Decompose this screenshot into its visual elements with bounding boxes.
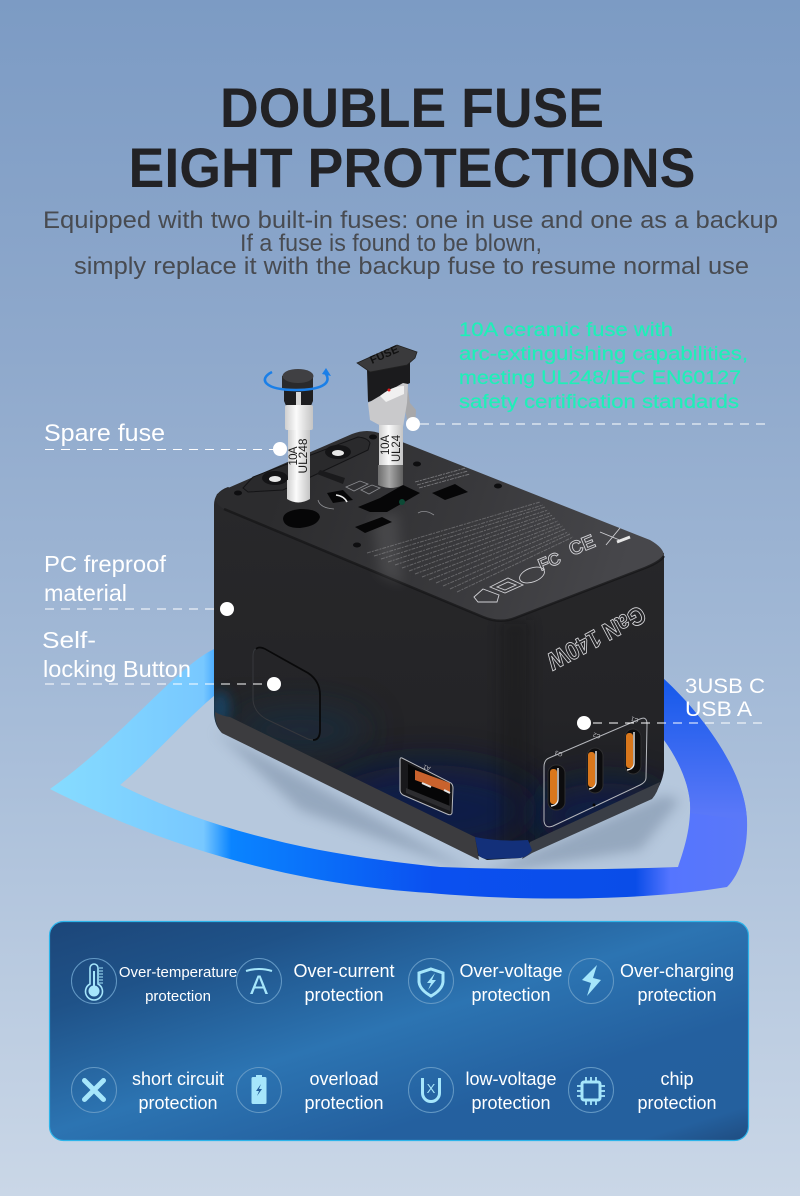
port labels: C1	[630, 714, 640, 723]
subtitle text block	[43, 207, 778, 280]
item: short circuit: protection	[138, 1093, 218, 1113]
callout: ceramic fuse: meeting UL248/IEC EN60127	[459, 368, 741, 389]
callout: USB ports: USB A	[685, 698, 752, 721]
item: over-current	[236, 958, 395, 1005]
callout: ceramic fuse: safety certification standards	[459, 392, 739, 413]
item: over-temperature: protection	[145, 988, 211, 1005]
red dot	[388, 388, 390, 392]
item: over-charging: protection	[637, 985, 717, 1005]
collar	[285, 405, 313, 430]
port C2	[587, 748, 603, 793]
plate holes	[262, 445, 351, 485]
bottom band right	[522, 782, 660, 859]
shield ribbon	[50, 649, 747, 899]
screws	[234, 434, 502, 548]
slot highlight	[336, 495, 347, 502]
callout: USB ports	[577, 675, 766, 730]
title	[128, 76, 696, 199]
fuse print: 10A	[288, 446, 300, 466]
blue reflections on body	[214, 686, 662, 860]
item: over-current: Over-current	[293, 961, 395, 981]
callout: self-locking button: locking Button	[43, 656, 191, 682]
item: short circuit: short circuit	[132, 1069, 224, 1089]
metal tip	[378, 465, 403, 488]
certification icons: FC	[535, 549, 564, 575]
fuse print: UL248	[298, 438, 310, 474]
cap body	[367, 355, 410, 402]
item: over-current: A	[250, 970, 268, 1000]
stub	[296, 392, 301, 408]
item: low-voltage: protection	[471, 1093, 551, 1113]
top face	[216, 431, 664, 621]
item: over-current: protection	[304, 985, 384, 1005]
bottom band left	[215, 712, 479, 860]
callout: PC fireproof material	[44, 551, 234, 616]
ceramic body	[379, 425, 403, 467]
socket holes	[283, 470, 468, 533]
certification icons	[474, 528, 630, 602]
cap	[282, 371, 313, 392]
spare fuse	[265, 368, 331, 502]
item: low-voltage	[408, 1068, 557, 1113]
charger device	[210, 431, 675, 860]
item: over-voltage	[408, 958, 563, 1005]
top edge lip	[224, 509, 664, 621]
printed markings	[367, 502, 573, 592]
port labels	[554, 714, 640, 757]
fuse print	[380, 434, 403, 462]
lower legs	[284, 388, 313, 408]
rotation arrow	[265, 372, 328, 390]
item: chip: chip	[660, 1069, 694, 1089]
reset hole	[592, 804, 596, 806]
installed fuse	[357, 344, 417, 488]
port C1	[625, 729, 641, 774]
hanging tab	[405, 383, 416, 428]
callout: PC fireproof material: material	[44, 580, 127, 606]
USB A port	[400, 758, 453, 815]
item: chip: protection	[637, 1093, 717, 1113]
item: low-voltage: low-voltage	[465, 1069, 557, 1089]
certification icons: CE	[566, 531, 598, 561]
caution text	[415, 468, 470, 488]
panel: eight protections	[50, 922, 748, 1140]
item: over-temperature	[72, 958, 237, 1005]
subtitle text block: Equipped with two built-in fuses: one in use and one as a backup	[43, 207, 778, 234]
title: EIGHT PROTECTIONS	[128, 136, 696, 199]
fuse print: UL24	[391, 434, 403, 462]
fuse print: 10A	[380, 435, 392, 455]
ceramic body	[288, 430, 310, 482]
callout: PC fireproof material: PC freproof	[44, 551, 167, 577]
plate outline	[243, 437, 370, 492]
callout: self-locking button: Self-	[42, 627, 96, 653]
metal tip	[287, 480, 310, 502]
callout: spare fuse	[44, 420, 287, 456]
cap label: FUSE	[368, 344, 401, 367]
callout: ceramic fuse: 10A ceramic fuse with	[459, 320, 673, 341]
item: short circuit	[72, 1068, 224, 1113]
port labels: C3	[554, 748, 564, 757]
blue corner	[475, 837, 532, 859]
USB C ports	[544, 714, 647, 827]
item: low-voltage: X	[427, 1081, 436, 1096]
item: over-charging	[568, 958, 734, 1005]
port labels: C2	[592, 730, 602, 739]
panel background	[50, 922, 748, 1140]
cap top	[357, 345, 417, 372]
body	[214, 487, 664, 860]
clip	[368, 383, 408, 427]
title: DOUBLE FUSE	[220, 76, 604, 139]
self-locking button	[253, 648, 320, 740]
item: overload	[236, 1068, 384, 1113]
callout: self-locking button	[42, 627, 281, 691]
item: over-charging: Over-charging	[620, 961, 734, 981]
callout: spare fuse: Spare fuse	[44, 420, 165, 447]
item: overload: overload	[309, 1069, 379, 1089]
callout: ceramic fuse: arc-extinguishing capabilities,	[459, 344, 748, 365]
subtitle text block: simply replace it with the backup fuse to resume normal use	[74, 253, 749, 280]
clip shine	[380, 386, 404, 402]
sheen	[372, 512, 402, 585]
switch markers	[318, 481, 434, 515]
item: over-temperature: Over-temperature	[119, 964, 237, 981]
callout: ceramic fuse	[459, 320, 748, 413]
USB A port: A1	[422, 762, 432, 771]
item: chip	[568, 1068, 717, 1113]
callout line: ceramic fuse	[406, 417, 766, 431]
callout: USB ports: 3USB C	[685, 675, 765, 698]
item: overload: protection	[304, 1093, 384, 1113]
GaN 140W logo: GaN 140W	[542, 600, 650, 675]
green lamp	[399, 499, 405, 505]
subtitle text block: If a fuse is found to be blown,	[240, 230, 542, 257]
fuse print	[288, 438, 310, 474]
item: over-voltage: protection	[471, 985, 551, 1005]
port C3	[548, 765, 565, 810]
item: over-voltage: Over-voltage	[459, 961, 563, 981]
